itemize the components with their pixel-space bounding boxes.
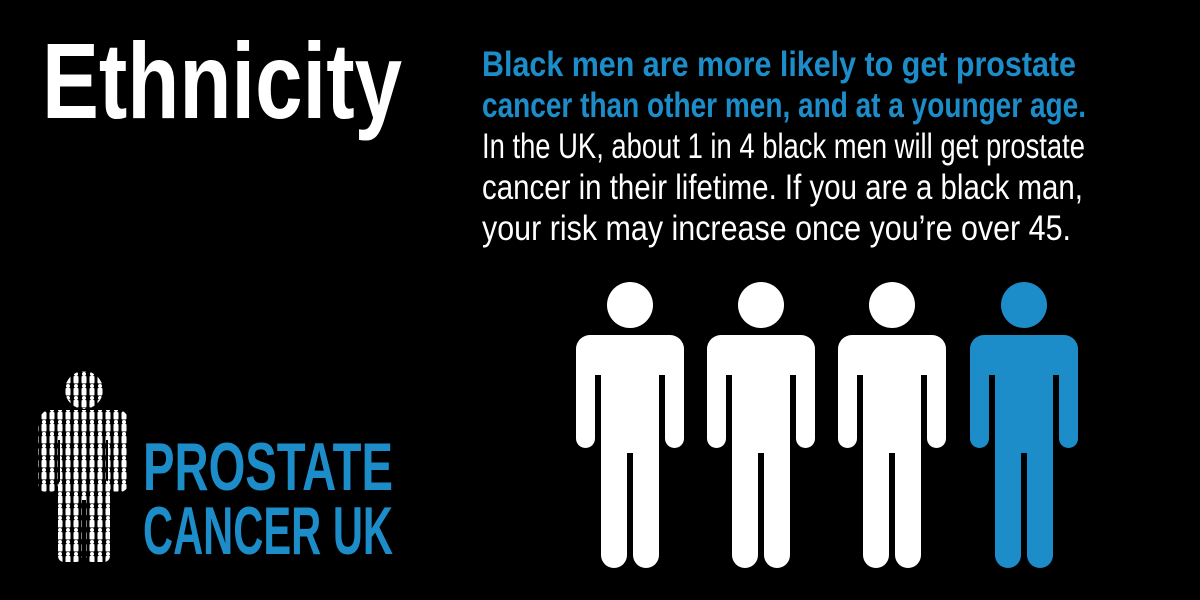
icon: man 3 xyxy=(838,282,946,568)
text block: description xyxy=(482,45,1086,248)
icon: man 2 xyxy=(707,282,815,568)
icon: four men, one highlighted xyxy=(576,282,1078,568)
icon: man 1 xyxy=(576,282,684,568)
logo: crowd figure xyxy=(38,371,128,562)
logo: wordmark: PROSTATE xyxy=(143,429,393,505)
logo: wordmark: CANCER UK xyxy=(143,493,393,569)
logo: wordmark xyxy=(143,429,393,569)
title: Ethnicity xyxy=(42,20,402,141)
icon: man 4 highlighted xyxy=(970,282,1078,568)
text block: description: Black men are more likely to get prostate xyxy=(482,45,1076,84)
text block: description: cancer in their lifetime. If you are a black man, xyxy=(482,168,1083,207)
text block: description: your risk may increase once you’re over 45. xyxy=(482,209,1071,248)
